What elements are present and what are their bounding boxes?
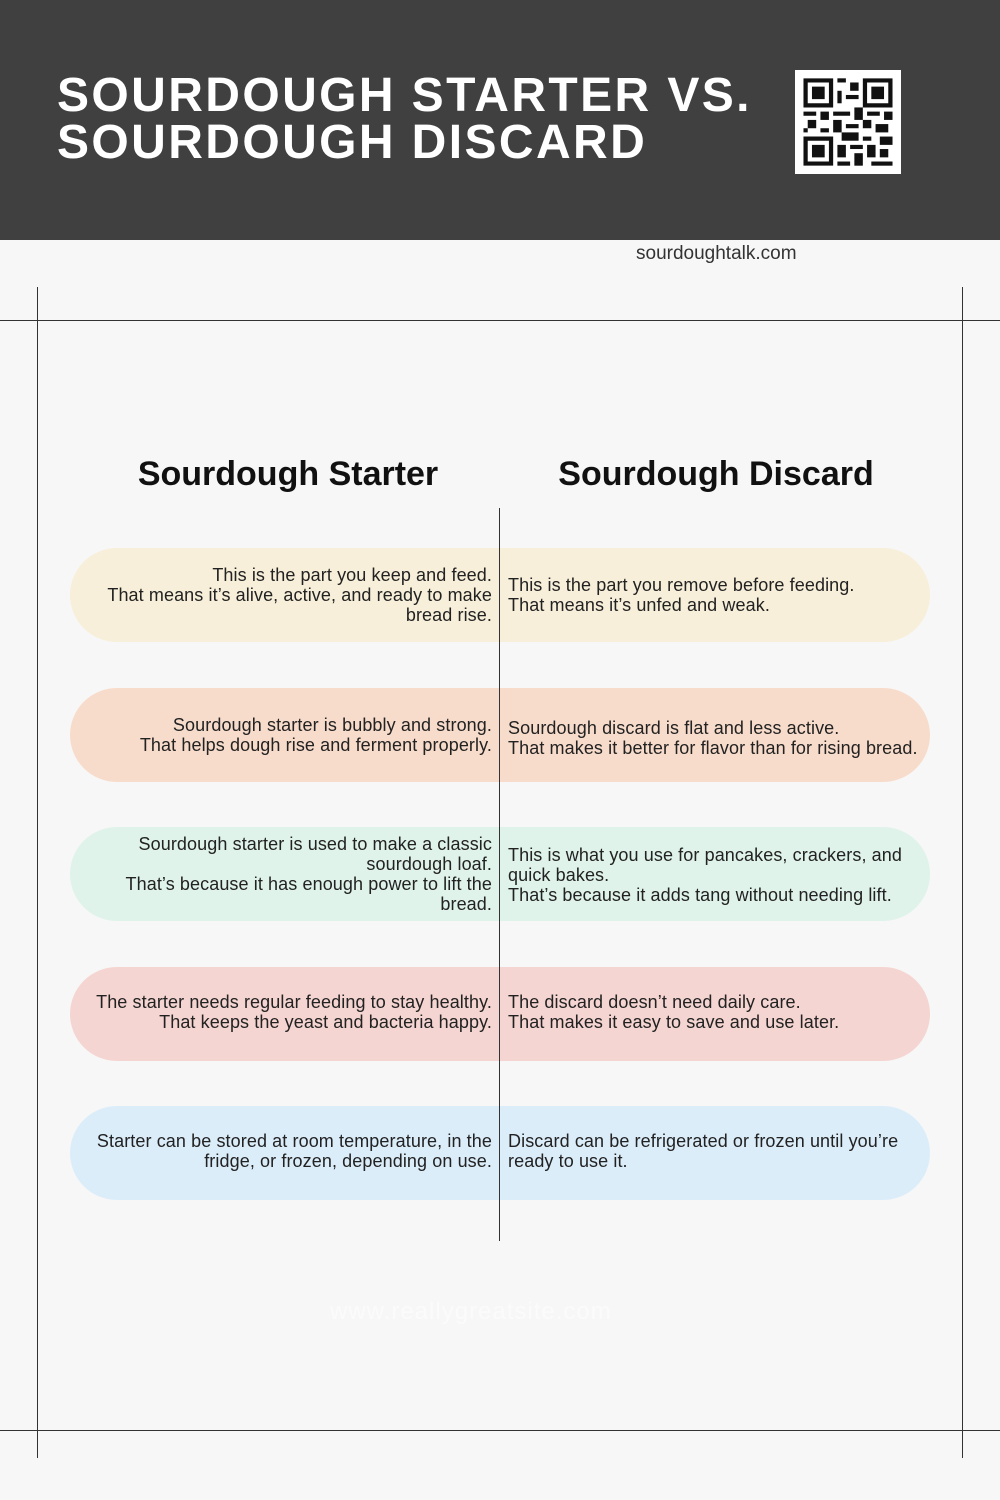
text row4 right: The discard doesn’t need daily care.: [508, 992, 801, 1012]
text row1 right: [508, 575, 854, 615]
text row3 right: quick bakes.: [508, 865, 609, 885]
title: SOURDOUGH DISCARD: [57, 116, 647, 169]
text row4 right: That makes it easy to save and use later.: [508, 1012, 839, 1032]
text row1 right: That means it’s unfed and weak.: [508, 595, 770, 615]
text row3 right: That’s because it adds tang without needing lift.: [508, 885, 892, 905]
qr code: [795, 70, 901, 174]
title: SOURDOUGH STARTER VS.: [57, 69, 752, 122]
text row1 left: [107, 565, 492, 625]
text row4 right: [508, 992, 839, 1032]
website: sourdoughtalk.com: [636, 243, 797, 264]
text row2 left: That helps dough rise and ferment properly.: [140, 735, 492, 755]
text row5 left: [97, 1131, 492, 1171]
text row2 left: Sourdough starter is bubbly and strong.: [173, 715, 492, 735]
text row1 left: That means it’s alive, active, and ready to make: [107, 585, 492, 605]
text row1 right: This is the part you remove before feeding.: [508, 575, 854, 595]
text row5 right: [508, 1131, 898, 1171]
text row2 right: Sourdough discard is flat and less active.: [508, 718, 839, 738]
text row5 right: ready to use it.: [508, 1151, 628, 1171]
heading: starter: Sourdough Starter: [138, 455, 438, 493]
row 1: [70, 548, 930, 642]
text row5 left: fridge, or frozen, depending on use.: [204, 1151, 492, 1171]
text row3 left: [126, 834, 492, 914]
header bar: [0, 0, 1000, 240]
faint watermark: www.reallygreatsite.com: [330, 1298, 612, 1325]
heading: discard: Sourdough Discard: [558, 455, 874, 493]
row 3: [70, 827, 930, 921]
row 5: [70, 1106, 930, 1200]
text row3 left: That’s because it has enough power to lift the: [126, 874, 492, 894]
text row1 left: This is the part you keep and feed.: [212, 565, 492, 585]
text row1 left: bread rise.: [406, 605, 492, 625]
text row4 left: [96, 992, 492, 1032]
text row3 left: bread.: [440, 894, 492, 914]
text row2 left: [140, 715, 492, 755]
text row4 left: That keeps the yeast and bacteria happy.: [159, 1012, 492, 1032]
row 2: [70, 688, 930, 782]
text row4 left: The starter needs regular feeding to stay healthy.: [96, 992, 492, 1012]
text row3 left: Sourdough starter is used to make a classic: [139, 834, 492, 854]
text row3 right: [508, 845, 902, 905]
text row3 left: sourdough loaf.: [366, 854, 492, 874]
text row5 left: Starter can be stored at room temperature, in the: [97, 1131, 492, 1151]
title: [57, 69, 752, 169]
text row2 right: That makes it better for flavor than for rising bread.: [508, 738, 918, 758]
center divider: [499, 508, 500, 1241]
text row2 right: [508, 718, 918, 758]
row 4: [70, 967, 930, 1061]
text row5 right: Discard can be refrigerated or frozen until you’re: [508, 1131, 898, 1151]
text row3 right: This is what you use for pancakes, crackers, and: [508, 845, 902, 865]
